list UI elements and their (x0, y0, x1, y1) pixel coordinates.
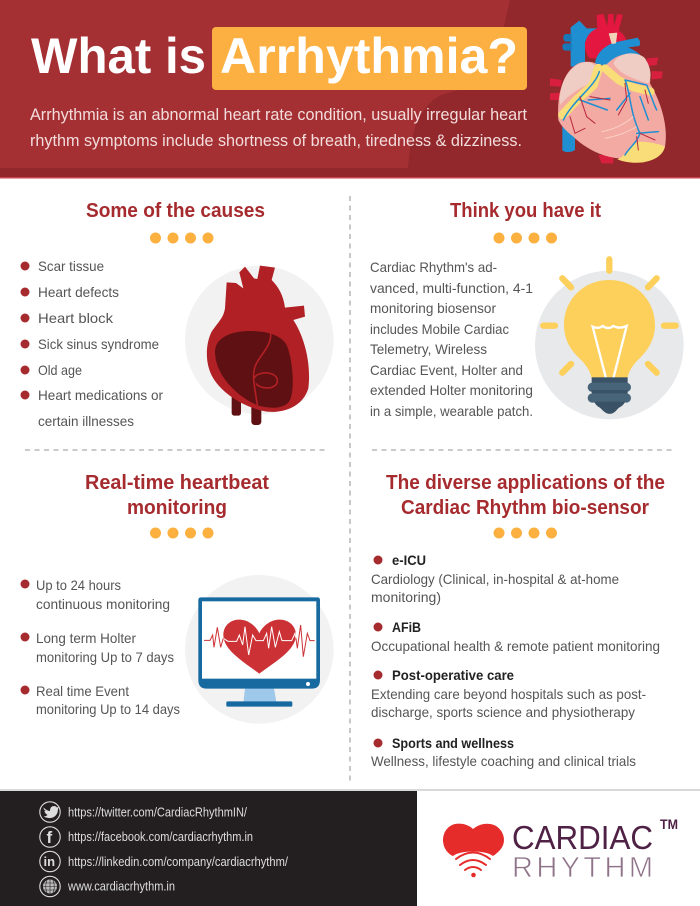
footer: logo (443, 816, 678, 884)
list: causes: certain illnesses (38, 413, 134, 429)
heading: real-time (85, 472, 269, 519)
heading: real-time: Real-time heartbeat (85, 472, 269, 494)
intro text: Arrhythmia is an abnormal heart rate condition, usually irregular heart (30, 106, 527, 124)
icon: twitter (40, 802, 60, 822)
item: AFiB: AFiB (392, 619, 421, 635)
link text: https://twitter.com/CardiacRhythmIN/ (68, 806, 247, 820)
paragraph: think: vanced, multi-function, 4-1 (370, 280, 533, 296)
vertical divider (349, 196, 351, 782)
heading: applications: Cardiac Rhythm bio-sensor (401, 497, 649, 519)
list: causes: Heart block (38, 310, 114, 326)
item: e-ICU: e-ICU (392, 552, 426, 568)
item: sports and wellness (371, 735, 636, 769)
list: causes: Scar tissue (38, 258, 104, 274)
heading: real-time: monitoring (127, 497, 227, 519)
item: AFiB: Occupational health & remote patient monitoring (371, 638, 660, 654)
list: real-time: continuous monitoring (36, 596, 170, 612)
paragraph: think: Cardiac Rhythm's ad- (370, 259, 497, 275)
heading: applications: The diverse applications of the (386, 472, 665, 494)
item: AFiB (371, 619, 660, 654)
list: real-time: Long term Holter (36, 630, 136, 646)
icon: facebook: f (46, 828, 52, 847)
paragraph: think: monitoring biosensor (370, 300, 496, 316)
dots: think (494, 232, 557, 244)
link text (67, 806, 288, 894)
item: post-operative care: Post-operative care (392, 667, 514, 683)
logo wordmark: RHYTHM (512, 852, 653, 884)
horizontal divider right (372, 449, 676, 451)
panel: think you have it (370, 200, 684, 419)
link text: www.cardiacrhythm.in (67, 880, 175, 894)
header banner (0, 0, 700, 178)
icon: linkedin (40, 851, 60, 872)
list: causes (20, 258, 163, 429)
item: e-ICU (371, 552, 619, 605)
panel: applications (371, 472, 665, 769)
list: real-time: monitoring Up to 7 days (36, 649, 174, 665)
title (31, 27, 527, 90)
paragraph: think (370, 259, 533, 419)
dots: applications (494, 528, 557, 538)
paragraph: think: extended Holter monitoring (370, 382, 533, 398)
title: Arrhythmia? (220, 28, 518, 84)
link text: https://facebook.com/cardiacrhythm.in (68, 830, 253, 844)
icon: light bulb (535, 259, 684, 419)
icon: linkedin: in (44, 854, 55, 869)
logo wordmark: TM (660, 816, 678, 832)
list: causes: Heart medications or (38, 387, 163, 403)
item: sports and wellness: Sports and wellness (392, 735, 514, 751)
list: real-time: Up to 24 hours (36, 577, 121, 593)
dots: real-time (150, 528, 214, 538)
heading: think: Think you have it (450, 200, 601, 222)
item: e-ICU: monitoring) (371, 589, 441, 605)
dots: causes (150, 232, 214, 244)
horizontal divider left (25, 449, 328, 451)
intro text: rhythm symptoms include shortness of breath, tiredness & dizziness. (30, 132, 522, 150)
item: e-ICU: Cardiology (Clinical, in-hospital & at-home (371, 571, 619, 587)
title: What is (31, 28, 206, 84)
list: real-time (20, 577, 180, 717)
icon: anatomical heart (550, 14, 666, 163)
paragraph: think: Telemetry, Wireless (370, 341, 487, 357)
item: post-operative care: discharge, sports science and physiotherapy (371, 704, 635, 720)
icon: heartbeat monitor (185, 575, 334, 724)
paragraph: think: includes Mobile Cardiac (370, 321, 509, 337)
list: causes: Old age (38, 362, 82, 378)
item: post-operative care: Extending care beyond hospitals such as post- (371, 686, 646, 702)
paragraph: think: Cardiac Event, Holter and (370, 362, 523, 378)
list: causes: Sick sinus syndrome (38, 336, 159, 352)
heading: applications (386, 472, 665, 519)
icon: facebook (40, 827, 60, 847)
item: sports and wellness: Wellness, lifestyle coaching and clinical trials (371, 753, 636, 769)
panel: real-time monitoring (20, 472, 334, 724)
icon: logo heart (443, 824, 504, 877)
intro text (30, 106, 527, 150)
list: real-time: monitoring Up to 14 days (36, 701, 180, 717)
panel: causes (20, 200, 334, 429)
item: post-operative care (371, 667, 646, 720)
icon: heart cross-section (185, 266, 334, 425)
link text: https://linkedin.com/company/cardiacrhythm/ (68, 855, 288, 869)
heading: causes: Some of the causes (86, 200, 265, 222)
logo wordmark: CARDIAC (512, 819, 653, 856)
list: causes: Heart defects (38, 284, 119, 300)
paragraph: think: in a simple, wearable patch. (370, 403, 533, 419)
footer: social links (0, 789, 700, 906)
logo wordmark (512, 816, 678, 884)
list: real-time: Real time Event (36, 683, 129, 699)
icon: globe (40, 876, 60, 897)
